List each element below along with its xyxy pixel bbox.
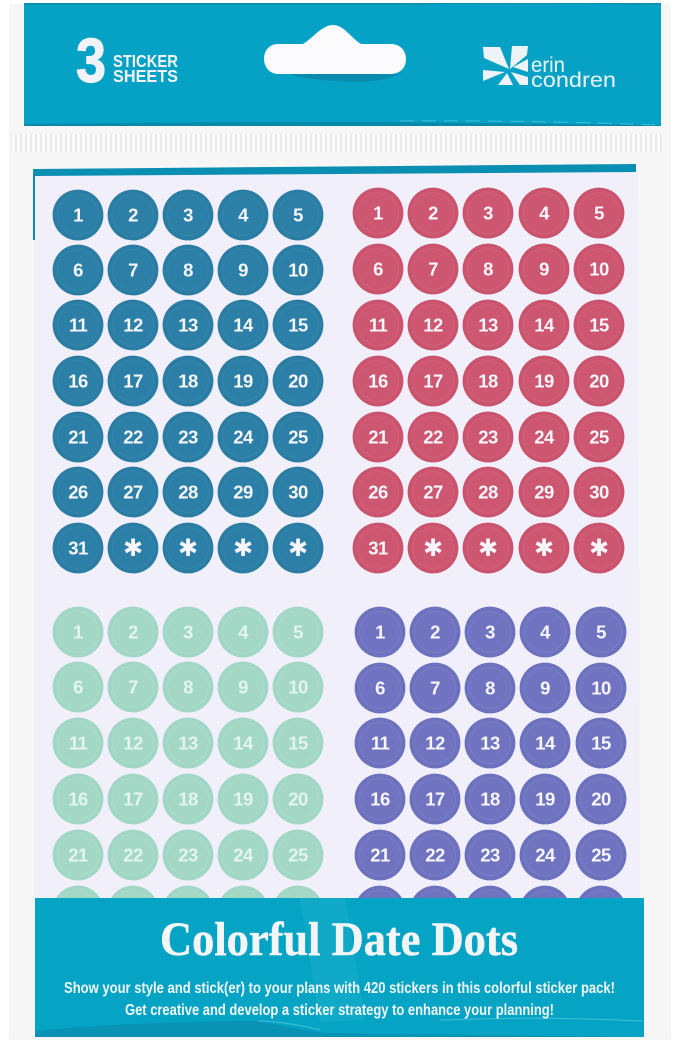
sticker group: blue: 10: [288, 260, 308, 280]
sticker group: blue: 21: [68, 426, 88, 448]
sticker sheets count: SHEETS: [113, 66, 178, 86]
sticker group: mint: 18: [178, 788, 198, 810]
sticker group: blue: 20: [288, 370, 308, 392]
sticker group: purple: 4: [540, 622, 551, 642]
sticker group: mint: 14: [233, 732, 254, 754]
sticker group: red: 12: [423, 314, 443, 336]
header card: [24, 3, 661, 126]
ribbed seal band: [11, 134, 663, 152]
sticker group: purple: 23: [480, 844, 500, 866]
sticker group: blue: 27: [123, 482, 143, 502]
sticker group: red: 24: [534, 426, 555, 448]
footer banner: [35, 898, 644, 1037]
sticker sheet paper: [34, 172, 640, 905]
sticker group: purple: 9: [540, 678, 550, 698]
sticker group: purple: 19: [535, 788, 555, 810]
sticker group: blue: 9: [238, 260, 248, 280]
sticker group: mint: 4: [238, 622, 249, 642]
sticker group: blue: ✱: [178, 534, 198, 562]
sticker group: red: 11: [369, 314, 387, 336]
sticker group: mint: 3: [183, 622, 193, 642]
sticker group: purple: 25: [591, 844, 611, 866]
sticker group: blue: ✱: [288, 534, 308, 562]
sticker group: mint: 19: [233, 788, 253, 810]
sticker group: red: 13: [478, 314, 498, 336]
sticker group: blue: 25: [288, 426, 308, 448]
sticker sheets count: 3: [76, 27, 106, 96]
sticker group: blue: 23: [178, 426, 198, 448]
sticker group: blue: 5: [293, 204, 303, 226]
sticker group: purple: 14: [535, 732, 556, 754]
sticker group: blue: [53, 190, 323, 573]
sticker group: blue: ✱: [123, 534, 143, 562]
sticker group: red: ✱: [478, 534, 498, 562]
sticker group: red: ✱: [589, 534, 609, 562]
sticker group: red: 4: [539, 202, 550, 224]
sticker group: blue: 30: [288, 482, 308, 502]
sticker sheets count: STICKER: [113, 51, 178, 71]
sticker group: blue: 3: [183, 204, 193, 226]
sticker group: blue: 31: [68, 538, 88, 558]
sticker group: blue: 15: [288, 314, 308, 336]
sticker group: purple: 3: [485, 622, 495, 642]
sticker group: mint: 9: [238, 676, 248, 698]
sticker group: purple: [355, 607, 626, 936]
sticker group: blue: 28: [178, 482, 198, 502]
sticker group: blue: 17: [123, 370, 143, 392]
description: [64, 980, 615, 1019]
hang hole: [264, 25, 406, 82]
sticker group: red: 8: [483, 258, 493, 280]
brand logo: condren: [531, 69, 616, 92]
sticker group: red: 23: [478, 426, 498, 448]
sticker group: red: 29: [534, 482, 554, 502]
sticker group: red: 15: [589, 314, 609, 336]
sticker group: blue: 11: [69, 314, 87, 336]
sticker group: blue: 18: [178, 370, 198, 392]
brand logo: [483, 46, 616, 92]
sticker group: mint: 1: [73, 622, 83, 642]
sticker group: red: 10: [589, 258, 609, 280]
sticker group: mint: 6: [73, 676, 83, 698]
sticker group: red: 3: [483, 202, 493, 224]
sticker group: purple: 17: [425, 788, 445, 810]
sticker group: red: 22: [423, 426, 443, 448]
sticker group: red: 19: [534, 370, 554, 392]
title: Colorful Date Dots: [160, 913, 518, 966]
sticker group: mint: 12: [123, 732, 143, 754]
sticker group: mint: 25: [288, 844, 308, 866]
sticker group: blue: 12: [123, 314, 143, 336]
sticker group: red: 31: [368, 538, 388, 558]
sticker group: purple: 7: [430, 678, 440, 698]
sticker sheets count: [76, 27, 178, 96]
sticker group: mint: 21: [68, 844, 88, 866]
sticker group: red: 25: [589, 426, 609, 448]
sticker group: purple: 24: [535, 844, 556, 866]
sticker group: mint: 13: [178, 732, 198, 754]
sticker group: mint: 7: [128, 676, 138, 698]
sticker group: blue: 16: [68, 370, 88, 392]
sticker group: purple: 15: [591, 732, 611, 754]
teal backing strip: [33, 164, 636, 240]
sticker group: red: ✱: [423, 534, 443, 562]
sticker group: purple: 1: [375, 622, 385, 642]
sticker group: red: 26: [368, 482, 388, 502]
sticker group: red: 18: [478, 370, 498, 392]
sticker group: blue: 29: [233, 482, 253, 502]
sticker group: blue: 2: [128, 204, 138, 226]
sticker group: purple: 20: [591, 788, 611, 810]
sticker group: mint: 23: [178, 844, 198, 866]
sticker group: mint: 2: [128, 622, 138, 642]
sticker group: blue: 19: [233, 370, 253, 392]
sticker group: blue: 22: [123, 426, 143, 448]
sticker group: blue: 26: [68, 482, 88, 502]
sticker group: red: 27: [423, 482, 443, 502]
sticker group: purple: 11: [371, 732, 389, 754]
sticker group: blue: 1: [73, 204, 83, 226]
brand logo: erin: [531, 54, 565, 77]
sticker group: mint: 11: [69, 732, 87, 754]
sticker group: red: 30: [589, 482, 609, 502]
sticker group: mint: 22: [123, 844, 143, 866]
sticker group: purple: 18: [480, 788, 500, 810]
sticker group: blue: 8: [183, 260, 193, 280]
sticker group: red: 7: [428, 258, 438, 280]
sticker group: mint: 5: [293, 622, 303, 642]
sticker group: blue: 24: [233, 426, 254, 448]
sticker group: purple: 12: [425, 732, 445, 754]
sticker group: purple: 2: [430, 622, 440, 642]
sticker group: mint: 17: [123, 788, 143, 810]
sticker group: red: 2: [428, 202, 438, 224]
sticker group: red: [353, 188, 624, 573]
sticker group: red: 16: [368, 370, 388, 392]
sticker group: blue: 13: [178, 314, 198, 336]
sticker group: mint: 10: [288, 676, 308, 698]
sticker group: mint: 20: [288, 788, 308, 810]
sticker group: red: 5: [594, 202, 604, 224]
sticker group: mint: 8: [183, 676, 193, 698]
sticker group: red: 20: [589, 370, 609, 392]
sticker group: purple: 10: [591, 678, 611, 698]
sticker group: mint: [53, 607, 323, 936]
sticker group: red: 21: [368, 426, 388, 448]
sticker group: mint: 15: [288, 732, 308, 754]
sticker group: mint: 24: [233, 844, 254, 866]
sticker group: blue: 7: [128, 260, 138, 280]
sticker group: blue: 6: [73, 260, 83, 280]
sticker group: blue: ✱: [233, 534, 253, 562]
sticker group: mint: 16: [68, 788, 88, 810]
sticker group: purple: 5: [596, 622, 606, 642]
sticker group: red: ✱: [534, 534, 554, 562]
sticker group: purple: 21: [370, 844, 390, 866]
sticker group: red: 14: [534, 314, 555, 336]
sticker group: red: 6: [373, 258, 383, 280]
sticker group: red: 17: [423, 370, 443, 392]
sticker group: red: 1: [373, 202, 383, 224]
sticker group: red: 9: [539, 258, 549, 280]
sticker group: blue: 14: [233, 314, 254, 336]
sticker group: purple: 22: [425, 844, 445, 866]
sticker group: blue: 4: [238, 204, 249, 226]
description: Get creative and develop a sticker strategy to enhance your planning!: [125, 1002, 554, 1019]
sticker group: purple: 8: [485, 678, 495, 698]
sticker group: purple: 6: [375, 678, 385, 698]
sticker group: red: 28: [478, 482, 498, 502]
sticker group: purple: 16: [370, 788, 390, 810]
sticker group: purple: 13: [480, 732, 500, 754]
